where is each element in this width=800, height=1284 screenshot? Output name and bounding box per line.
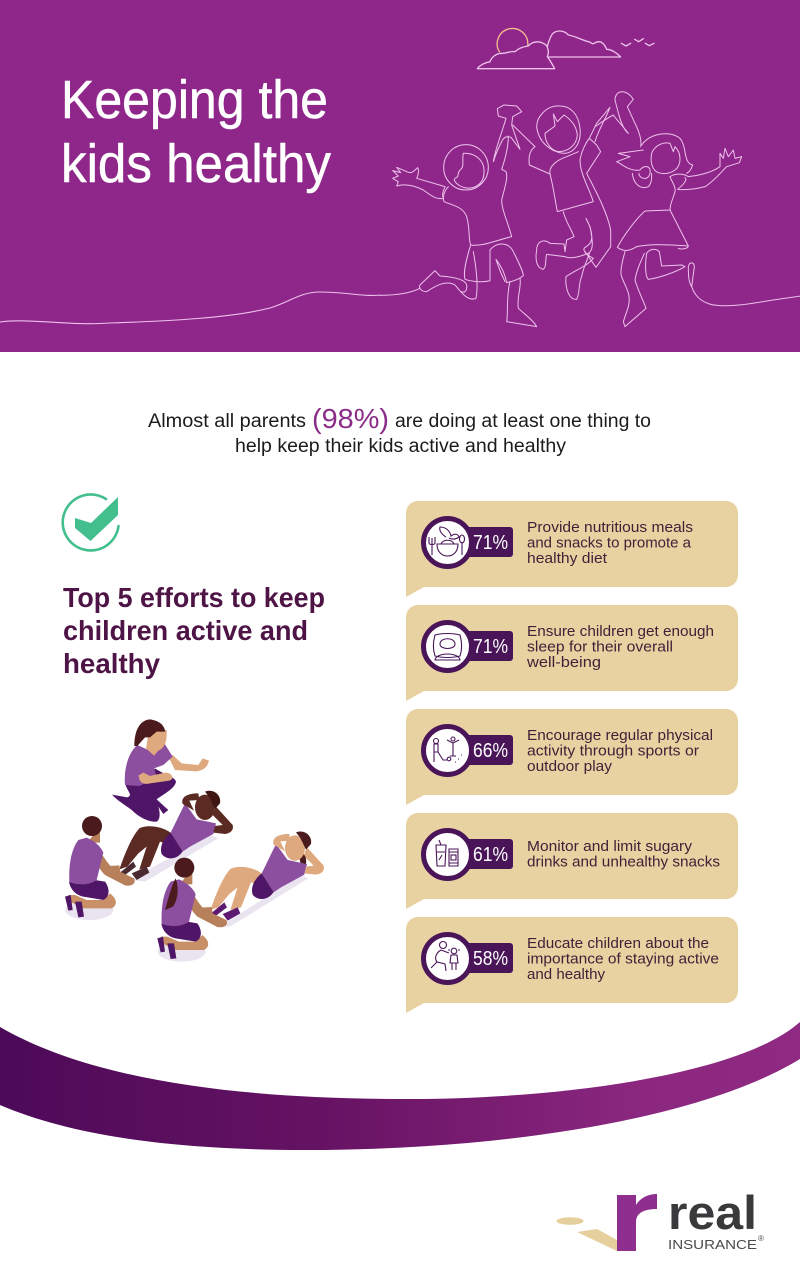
panel: effort card 3 physical activity bbox=[406, 709, 738, 805]
title bbox=[61, 70, 331, 194]
percentage badge 61%: 61% bbox=[473, 844, 508, 866]
logo: Real Insurance: ® bbox=[758, 1234, 764, 1243]
icon: child asleep in bed bbox=[434, 634, 462, 660]
card text: and healthy bbox=[527, 967, 606, 983]
person: helper holding feet, short hair bbox=[65, 816, 135, 917]
percentage badge 66% bbox=[424, 726, 513, 774]
card text bbox=[527, 728, 713, 775]
percentage badge 71% bbox=[424, 622, 513, 670]
panel: effort card 2 sleep bbox=[406, 605, 738, 701]
title: Keeping the bbox=[61, 70, 328, 130]
panel: header bbox=[0, 0, 800, 352]
heading: top 5 efforts: healthy bbox=[63, 648, 160, 679]
logo: Real Insurance bbox=[556, 1186, 764, 1252]
panel: effort card 5 education bbox=[406, 917, 738, 1013]
intro statement bbox=[148, 403, 651, 457]
illustration: children doing sit-ups with partners bbox=[65, 719, 324, 962]
card text: Monitor and limit sugary bbox=[527, 839, 693, 855]
card text: importance of staying active bbox=[527, 952, 719, 968]
intro statement: (98%) bbox=[312, 403, 389, 434]
panel: effort card 1 nutritious meals bbox=[406, 501, 738, 597]
card text: drinks and unhealthy snacks bbox=[527, 854, 720, 870]
card text: healthy diet bbox=[527, 551, 607, 567]
heading: top 5 efforts: Top 5 efforts to keep bbox=[63, 582, 325, 613]
percentage badge 71%: 71% bbox=[473, 636, 508, 658]
person: seated coach bbox=[112, 719, 209, 822]
panel: effort card 4 sugary drinks bbox=[406, 813, 738, 909]
card text bbox=[527, 936, 719, 983]
card text: Ensure children get enough bbox=[527, 624, 714, 640]
intro statement: Almost all parents bbox=[148, 411, 306, 432]
person: sit-up, light skin bbox=[210, 831, 324, 921]
card text: activity through sports or bbox=[527, 744, 699, 760]
card text: Provide nutritious meals bbox=[527, 520, 693, 536]
logo: Real Insurance: real bbox=[668, 1186, 757, 1239]
icon: adult kneeling with child bbox=[431, 942, 460, 971]
decorative purple swoosh band bbox=[0, 1022, 800, 1150]
icon: soft drink glass and can bbox=[436, 840, 458, 866]
heading: top 5 efforts: children active and bbox=[63, 615, 308, 646]
kid 2 bbox=[537, 106, 580, 153]
card text bbox=[526, 624, 714, 671]
kid 3 bbox=[642, 134, 693, 173]
card text: Educate children about the bbox=[527, 936, 709, 952]
percentage badge 61% bbox=[424, 830, 513, 878]
person: sit-up, dark skin bbox=[119, 791, 233, 880]
icon: salad bowl with fork and spoon bbox=[429, 527, 464, 556]
card text: well-being bbox=[526, 655, 601, 671]
percentage badge 58% bbox=[424, 934, 513, 982]
icon: green check mark bbox=[63, 494, 118, 550]
title: kids healthy bbox=[61, 134, 331, 194]
illustration: jumping children line art with sun and clouds bbox=[0, 28, 800, 327]
intro statement: are doing at least one thing to bbox=[395, 411, 651, 432]
intro statement: help keep their kids active and healthy bbox=[235, 436, 567, 457]
percentage badge 58%: 58% bbox=[473, 948, 508, 970]
percentage badge 71%: 71% bbox=[473, 532, 508, 554]
kid 1 bbox=[444, 145, 488, 190]
percentage badge 71% bbox=[424, 518, 513, 566]
icon: children playing sport bbox=[434, 737, 462, 762]
card text: and snacks to promote a bbox=[527, 536, 692, 552]
card text: Encourage regular physical bbox=[527, 728, 713, 744]
card text bbox=[527, 520, 693, 567]
heading: top 5 efforts bbox=[63, 582, 325, 679]
percentage badge 66%: 66% bbox=[473, 740, 508, 762]
person: helper holding feet, ponytail bbox=[157, 858, 227, 959]
logo: Real Insurance: INSURANCE bbox=[668, 1237, 757, 1252]
card text: sleep for their overall bbox=[527, 640, 673, 656]
card text bbox=[527, 839, 720, 870]
card text: outdoor play bbox=[527, 759, 613, 775]
